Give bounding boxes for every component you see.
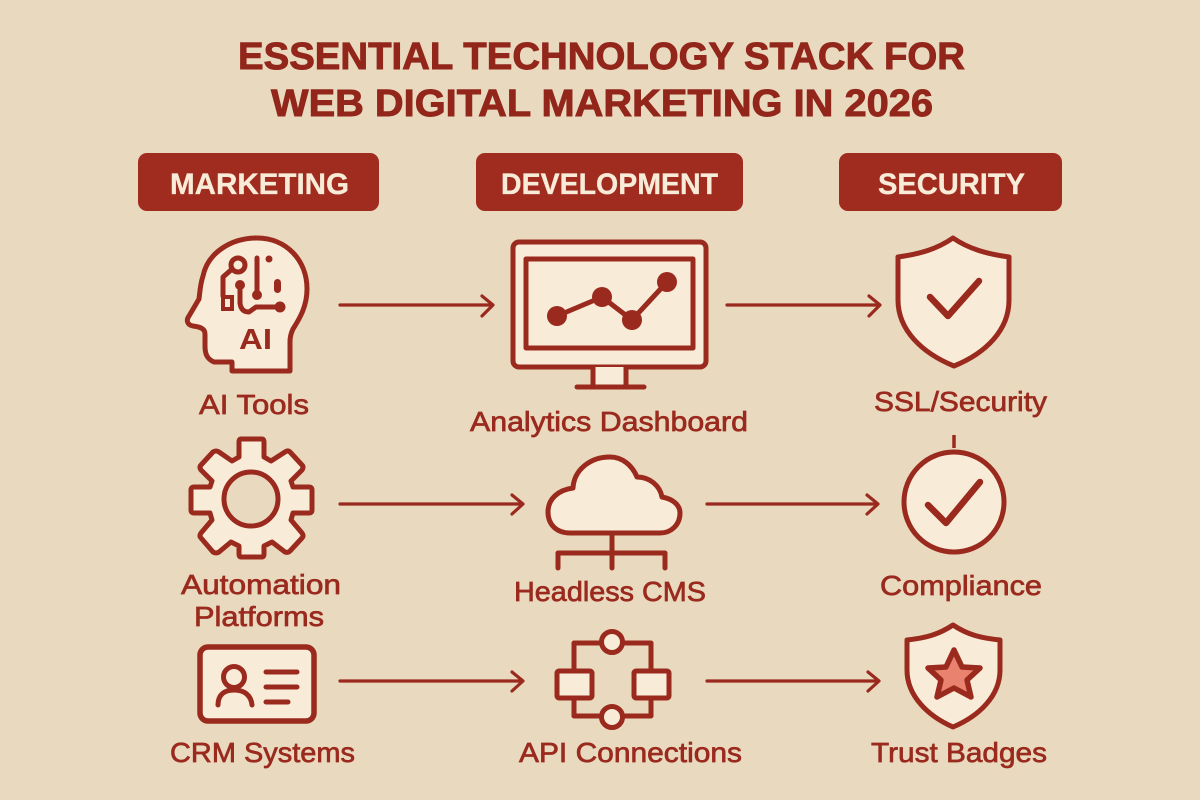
arrow: Automation to CMS <box>340 495 523 514</box>
heading: Development: DEVELOPMENT <box>501 168 718 201</box>
heading: Development <box>476 153 743 211</box>
label: Automation Platforms: Automation <box>181 569 341 600</box>
icon: API connections <box>557 632 669 728</box>
icon: automation gear <box>191 439 312 557</box>
label: Automation Platforms: Platforms <box>194 601 324 632</box>
label: Analytics Dashboard: Analytics Dashboard <box>470 406 748 437</box>
icon: analytics monitor <box>513 242 706 387</box>
label: Trust Badges: Trust Badges <box>871 737 1047 768</box>
icon: compliance check <box>904 435 1004 552</box>
label: Automation Platforms <box>181 569 341 632</box>
icon: CRM card <box>200 647 314 721</box>
title <box>238 36 965 125</box>
label: AI Tools: AI Tools <box>199 389 309 420</box>
arrow: CMS to Compliance <box>707 495 878 514</box>
heading: Marketing: MARKETING <box>170 168 349 201</box>
icon: AI head <box>187 238 307 371</box>
heading: Security: SECURITY <box>878 168 1025 201</box>
heading: Marketing <box>138 153 379 211</box>
arrow: AI Tools to Analytics <box>340 296 493 316</box>
icon: security shield <box>898 238 1009 366</box>
icon text: AI: AI <box>239 324 272 356</box>
heading: Security <box>839 153 1062 211</box>
icon: trust badge shield <box>907 625 1000 727</box>
arrow: CRM to API <box>340 672 523 691</box>
title: ESSENTIAL TECHNOLOGY STACK FOR <box>238 36 965 78</box>
label: CRM Systems: CRM Systems <box>170 737 355 768</box>
label: Compliance: Compliance <box>880 570 1042 601</box>
icon: headless CMS cloud <box>548 457 680 568</box>
label: API Connections: API Connections <box>519 737 742 768</box>
arrow: Analytics to Security <box>727 296 880 316</box>
arrow: API to Trust Badges <box>707 672 879 691</box>
label: SSL/Security: SSL/Security <box>874 386 1047 417</box>
title: WEB DIGITAL MARKETING IN 2026 <box>271 83 933 125</box>
label: Headless CMS: Headless CMS <box>514 576 706 607</box>
